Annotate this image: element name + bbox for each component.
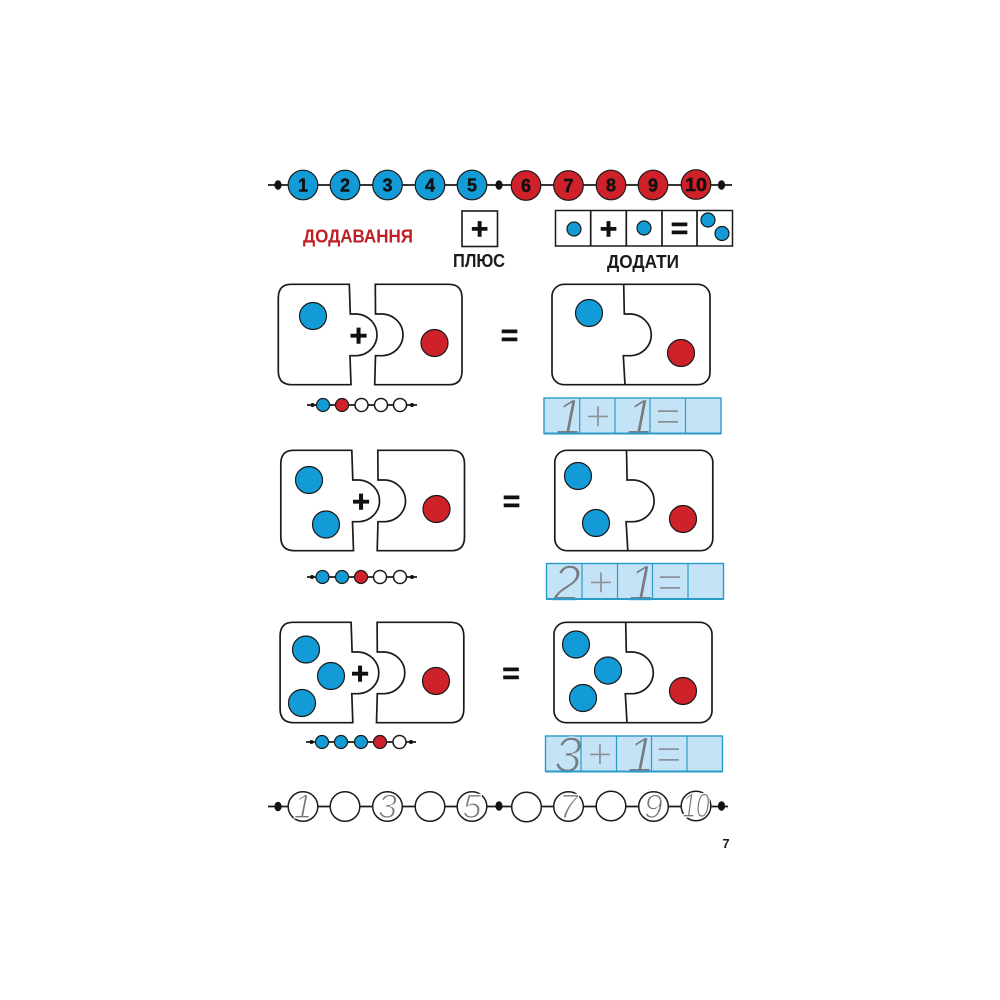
tracing boxes 1 + 1 =: =	[655, 392, 681, 441]
number line 1 to 10: 1	[298, 176, 308, 196]
equals sign: =	[502, 657, 520, 690]
tracing boxes 2 + 1 =: +	[588, 558, 614, 607]
number line 1 to 10	[268, 170, 732, 200]
tracing number line	[268, 787, 728, 826]
left puzzle piece with two blue dots: +	[352, 484, 370, 519]
left puzzle piece with three blue dots	[280, 622, 379, 723]
number line 1 to 10: 4	[425, 176, 435, 196]
right puzzle piece with one red dot	[377, 450, 464, 551]
tracing boxes 1 + 1 =	[544, 389, 721, 445]
tracing boxes 2 + 1 =: 1	[628, 555, 656, 611]
page number: 7	[722, 836, 730, 851]
number line 1 to 10: 5	[467, 176, 477, 196]
tracing boxes 3 + 1 =: 3	[554, 727, 582, 783]
tracing boxes 3 + 1 =: +	[587, 730, 613, 779]
tracing boxes 1 + 1 =: 1	[555, 389, 583, 445]
exercise 2: 2 + 1	[281, 450, 724, 611]
equals sign: =	[501, 319, 518, 352]
tracing boxes 3 + 1 =: =	[656, 730, 682, 779]
number line 1 to 10: 8	[606, 176, 616, 196]
tracing number line: 10	[682, 787, 710, 825]
number line 1 to 10: 10	[685, 175, 707, 195]
add example strip with label: ДОДАТИ	[607, 252, 679, 272]
plus sign box with label	[453, 211, 505, 271]
left puzzle piece with two blue dots	[281, 450, 380, 551]
right puzzle piece with one red dot	[376, 622, 464, 723]
tracing boxes 1 + 1 =: 1	[626, 389, 654, 445]
right puzzle piece with one red dot	[375, 284, 462, 385]
number line 1 to 10: 7	[563, 176, 574, 196]
tracing boxes 1 + 1 =: +	[585, 392, 611, 441]
number line 1 to 10: 2	[340, 176, 350, 196]
tracing boxes 3 + 1 =: 1	[627, 727, 655, 783]
tracing boxes 2 + 1 =	[546, 555, 724, 611]
tracing number line: 1	[294, 788, 312, 826]
plus sign box with label: +	[471, 213, 488, 246]
tracing number line: 7	[559, 788, 579, 826]
bead line	[306, 736, 416, 748]
plus sign box with label: ПЛЮС	[453, 251, 505, 271]
bead line	[307, 570, 417, 584]
number line 1 to 10: 3	[382, 176, 393, 196]
tracing number line: 5	[463, 788, 482, 826]
bead line	[307, 398, 417, 412]
left puzzle piece with one blue dot	[278, 284, 377, 385]
tracing boxes 2 + 1 =: =	[657, 558, 683, 607]
joined puzzle result	[555, 450, 713, 551]
equals sign: =	[503, 485, 520, 518]
tracing number line: 9	[644, 788, 663, 826]
number line 1 to 10: 6	[521, 176, 531, 196]
exercise 1: 1 + 1	[278, 284, 721, 445]
number line 1 to 10: 9	[648, 176, 658, 196]
exercise 3: 3 + 1	[280, 622, 722, 783]
add example strip with label: +	[600, 213, 617, 246]
tracing number line: 3	[378, 788, 397, 826]
tracing boxes 2 + 1 =: 2	[552, 555, 581, 611]
add example strip with label	[556, 210, 732, 272]
heading: addition: ДОДАВАННЯ	[303, 226, 413, 246]
left puzzle piece with three blue dots: +	[351, 656, 369, 691]
joined puzzle result	[554, 622, 712, 723]
left puzzle piece with one blue dot: +	[349, 318, 368, 353]
joined puzzle result	[552, 284, 710, 385]
tracing boxes 3 + 1 =	[546, 727, 722, 783]
add example strip with label: =	[671, 212, 688, 245]
